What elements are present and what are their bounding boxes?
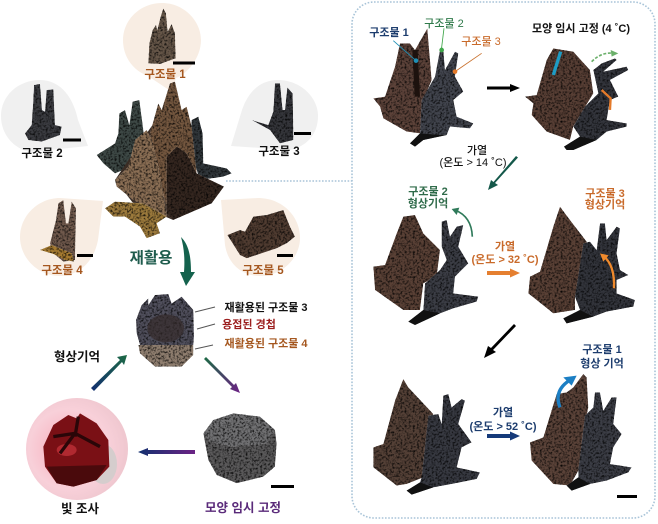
label: welded hinge: 용접된 경첩 [222, 317, 276, 331]
label: heat above 52C: 가열 [493, 405, 513, 419]
label: recycling: 재활용 [130, 249, 172, 267]
panel: shape-memory sequence dotted frame [352, 2, 655, 518]
arrow: orange [487, 268, 520, 278]
photo: temporarily fixed [525, 48, 628, 150]
label: structure 1: 구조물 1 [144, 68, 186, 81]
scale bar cylinder [271, 485, 294, 488]
arrow: navy [487, 432, 520, 440]
photo: original structures [373, 28, 473, 147]
label: recycled structure 3: 재활용된 구조물 3 [224, 300, 308, 314]
scale bar 4 [77, 254, 93, 257]
scale bar 1 [173, 62, 195, 64]
label: structure 1: 구조물 1 [369, 26, 409, 39]
label: temporary fixing: 모양 임시 고정 [205, 501, 281, 515]
label: structure 3: 구조물 3 [258, 145, 300, 158]
label: structure 3: 구조물 3 [461, 35, 501, 48]
light irradiated object [26, 398, 128, 500]
leader lines [195, 307, 215, 349]
label: heat above 14C: 가열 [467, 144, 487, 157]
label: structure 1 memory: 구조물 1 [582, 343, 622, 356]
label: temporary fixing 4C: 모양 임시 고정 (4 ˚C) [532, 22, 630, 35]
label: structure 1 memory line 2: 형상 기억 [580, 356, 624, 370]
label: temperature 52C: (온도 > 52 ˚C) [469, 420, 537, 433]
markers on structures [393, 28, 482, 74]
label: structure 2: 구조물 2 [21, 147, 63, 160]
icon: structure 1 [148, 8, 176, 64]
arrow: cool step [487, 84, 520, 92]
arrow: green diagonal [488, 156, 518, 190]
arrow: recycling [180, 237, 195, 286]
arrow: temporary fixing [204, 357, 240, 393]
icon: structure 3 [252, 83, 293, 143]
bubble: structure 3 [231, 80, 318, 158]
temporarily fixed cylinder [203, 413, 277, 483]
label: heat above 32C: 가열 [495, 239, 515, 253]
label: structure 5: 구조물 5 [242, 264, 284, 277]
arrow: black diagonal [484, 324, 516, 358]
label: light irradiation: 빛 조사 [61, 502, 99, 516]
bubble: structure 1 [123, 3, 201, 92]
recycled hinge object [136, 294, 194, 367]
label: structure 3 memory: 구조물 3 [585, 187, 625, 200]
photo: structure 1 recovered [530, 374, 632, 491]
label: structure 2 memory line 2: 형상기억 [408, 196, 448, 210]
photo: structure 3 recovered [528, 207, 635, 323]
bubble: structure 2 [1, 80, 88, 160]
dotted connector from main structure to panel [226, 180, 352, 182]
scale bar 2 [63, 138, 81, 142]
scale bar 5 [277, 254, 293, 257]
main assembled structure [97, 82, 232, 238]
arrow: irradiation [138, 448, 195, 456]
label: recycled structure 4: 재활용된 구조물 4 [224, 336, 308, 350]
label: shape memory: 형상기억 [54, 349, 100, 364]
photo: before final heat [373, 379, 480, 495]
icon: structure 4 [40, 200, 76, 262]
label: temperature 32C: (온도 > 32 ˚C) [471, 253, 539, 266]
label: structure 2: 구조물 2 [424, 17, 464, 30]
icon: structure 2 [25, 84, 62, 142]
label: structure 4: 구조물 4 [41, 264, 83, 277]
icon: structure 5 [227, 210, 295, 258]
scale bar right panel [617, 495, 637, 498]
label: structure 3 memory line 2: 형상기억 [585, 197, 625, 211]
bubble: structure 5 [221, 198, 300, 277]
bubble: structure 4 [20, 198, 103, 277]
photo: structure 2 recovered [373, 208, 478, 325]
label: structure 2 memory: 구조물 2 [408, 185, 448, 198]
scale bar 3 [294, 132, 311, 135]
arrow: shape memory [91, 355, 127, 391]
label: temperature 14C: (온도 > 14 ˚C) [439, 156, 507, 169]
